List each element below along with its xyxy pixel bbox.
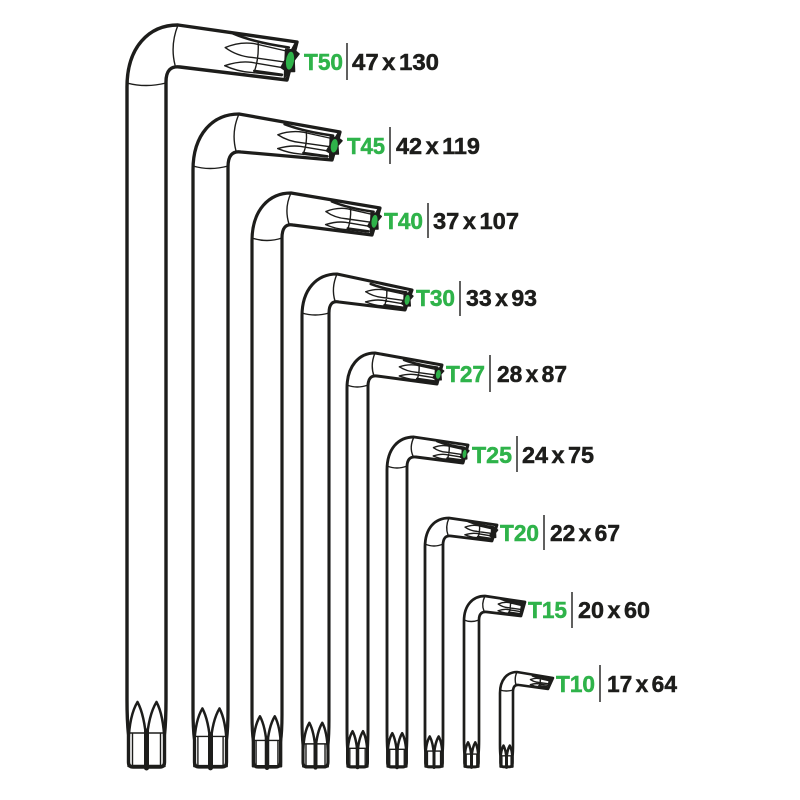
label T50 <box>304 43 439 80</box>
long arm tip <box>426 736 442 767</box>
long arm tip <box>303 723 328 768</box>
long arm tip <box>388 733 406 768</box>
short arm tip <box>275 123 343 161</box>
short arm tip <box>530 675 550 688</box>
wrench T10 <box>500 672 553 767</box>
label T45: T45 <box>347 133 385 159</box>
short arm tip <box>364 283 414 311</box>
wrench outline <box>127 25 297 767</box>
label T25: T25 <box>472 442 512 468</box>
wrench outline <box>425 518 497 767</box>
label T15: 20 x 60 <box>578 597 650 623</box>
label T30: 33 x 93 <box>466 285 537 311</box>
long arm tip <box>194 708 227 768</box>
short arm tip <box>398 359 444 384</box>
label T20 <box>500 515 620 550</box>
label T45 <box>347 127 480 164</box>
label T45: 42 x 119 <box>396 133 480 159</box>
wrench T27 <box>347 353 444 768</box>
wrench T50 <box>127 25 301 768</box>
wrench T30 <box>302 274 414 768</box>
label T10: 17 x 64 <box>607 671 677 697</box>
long arm tip <box>465 742 478 767</box>
wrench outline <box>193 114 340 767</box>
label T10: T10 <box>556 671 595 697</box>
long arm tip <box>128 702 164 768</box>
short arm tip <box>324 201 382 236</box>
label T40: T40 <box>384 208 423 234</box>
label T15: T15 <box>528 597 567 623</box>
wrench T40 <box>252 193 382 768</box>
label T40 <box>384 203 519 238</box>
long arm tip <box>348 731 367 768</box>
label T20: T20 <box>500 520 539 546</box>
label T27: 28 x 87 <box>497 361 567 387</box>
label T25 <box>472 436 594 472</box>
wrench T20 <box>425 518 498 767</box>
short arm tip <box>222 33 301 81</box>
label T27: T27 <box>446 361 485 387</box>
label T15 <box>528 592 650 628</box>
label T50: T50 <box>304 49 343 75</box>
label T30: T30 <box>416 285 455 311</box>
label T25: 24 x 75 <box>522 442 594 468</box>
short arm tip <box>464 521 498 541</box>
short arm tip <box>497 599 523 615</box>
wrench T45 <box>193 114 343 768</box>
wrench outline <box>302 274 412 767</box>
label T10 <box>556 665 677 702</box>
wrench outline <box>347 353 442 767</box>
label T50: 47 x 130 <box>352 49 439 75</box>
wrench outline <box>500 672 553 767</box>
wrench outline <box>252 193 380 767</box>
wrench outline <box>387 437 468 767</box>
short arm tip <box>432 441 470 463</box>
long arm tip <box>501 746 512 767</box>
label T30 <box>416 281 537 316</box>
long arm tip <box>253 716 281 768</box>
wrench T25 <box>387 437 470 768</box>
label T40: 37 x 107 <box>433 208 519 234</box>
label T20: 22 x 67 <box>550 520 620 546</box>
label T27 <box>446 355 567 392</box>
wrench T15 <box>464 596 525 767</box>
wrench outline <box>464 596 525 767</box>
